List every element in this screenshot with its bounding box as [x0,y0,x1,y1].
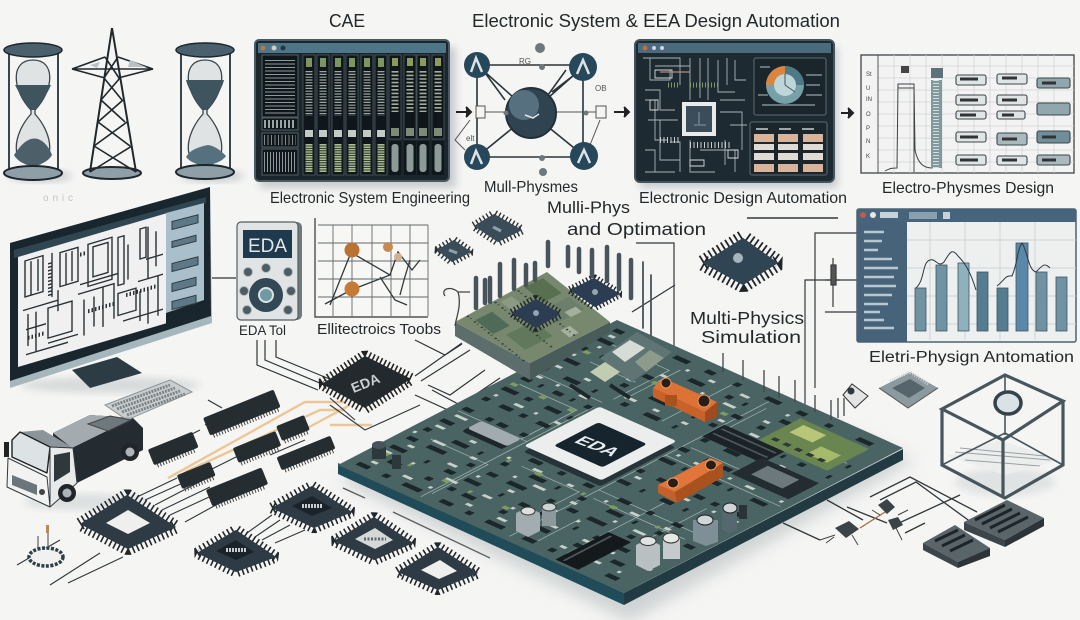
label: EDA tool: EDA Tol [239,322,286,338]
DIP C [233,431,282,464]
window title bar [857,209,1076,222]
orange block rear [653,378,717,422]
truck windshield [12,432,50,473]
chips: bottom row [80,486,478,590]
wires: central connections [208,340,520,558]
central package: EDA [570,434,626,459]
icon: small ring [29,525,63,566]
board chip left [512,299,560,328]
signal columns [303,55,444,175]
label: electronics tools: Ellitectroics Toobs [317,321,441,338]
label: faded text: onic [43,193,73,204]
title: CAE: CAE [329,10,365,31]
buttons [240,264,296,314]
board shadow [338,340,915,620]
truck cargo bed [53,415,143,483]
truck side [50,447,77,507]
network nodes: outer [464,52,598,170]
arrow: design to physics chart [841,108,853,118]
title: electronic system and design automation: Electronic System & EEA Design Automation [472,10,840,31]
board chip right [570,278,620,307]
DIP A [203,389,281,437]
button panel [750,122,827,175]
dark component texture [358,330,883,583]
chip: large multi-physics [703,238,778,285]
chip: EDA labelled package: EDA [349,370,382,396]
trend line [916,243,1050,290]
truck front [7,458,50,507]
axis labels: N [866,139,870,145]
control wheel [249,278,283,312]
wheels [58,443,139,502]
main circuit board [338,320,903,605]
IC: centre right [702,425,784,463]
small tags: elt [466,134,475,143]
monitor top bar [14,197,206,258]
icon: wireframe cube [942,375,1063,498]
raised module near top [570,332,672,398]
copper traces [352,331,883,588]
module: bottom right large [964,500,1044,547]
icon: hourglass left [4,43,72,182]
wires: bottom right [783,477,977,540]
DIP B [148,432,199,466]
board capacitors [372,441,747,571]
chart: electro-physics design [861,55,1074,173]
light component texture [363,333,875,579]
chips: dual inline packages [148,389,336,508]
chip: small top right [474,214,522,242]
truck grille [12,475,37,495]
label: multi-phys heading: Mulli-Phys [547,199,630,217]
panel: electro-physics analysis window [857,209,1076,342]
bars [915,243,1067,331]
wires: orange signal traces [168,402,372,478]
label: simulation: Simulation [701,327,801,347]
circuit schematic [643,58,747,172]
icon: tiny connector [843,384,868,408]
shadow: wireframe cube [955,468,1055,496]
label: electro-physics design: Electro-Physmes Design [882,180,1054,197]
small markers [504,43,588,176]
wires: chip bus [17,398,420,585]
panel: EDA handheld tool: EDA [248,236,287,257]
sidebar [857,222,907,342]
clip [444,289,470,326]
shadow: truck [23,494,147,510]
green component texture [380,348,827,563]
connectors: top right leader lines [632,218,857,413]
network node: centre [506,88,556,138]
chip 3 [272,486,352,528]
pill module [462,421,521,449]
upper daughter board [444,242,651,380]
label: and optimation: and Optimation [567,219,706,239]
axis labels: St [866,72,872,78]
panel: electronic design automation window [635,40,838,188]
grid [907,222,1076,340]
chip 5 [398,547,478,590]
icon: delivery truck [4,415,143,507]
axis labels: IN [866,97,872,103]
small tags: RG [519,57,531,66]
DIP F [177,462,216,490]
pin headers [723,353,844,420]
chip 2 [197,530,276,572]
small tags: OB [595,84,607,93]
icon: transmission tower [72,28,153,179]
diagram: multi-physics network [455,43,607,176]
board edges [338,463,624,605]
IC: right large [731,458,819,499]
EDA display [243,230,292,258]
icon: small iso block [879,372,938,408]
vertical pin row [476,242,651,335]
green island [759,418,869,471]
axis labels [866,72,872,160]
module: bottom right small [923,525,990,568]
orange block front [658,458,723,503]
axis labels: O [866,112,871,118]
axis labels: U [866,86,870,92]
panel: electronic system engineering window [255,40,456,188]
chart: electronics tools [315,218,428,317]
central chip [682,102,716,136]
DIP E [276,436,336,471]
truck roof [20,430,73,448]
chip 4 [334,517,413,560]
chip 1 [80,495,176,549]
panel: EDA handheld tool [237,222,302,320]
arrow: system to network [456,107,471,117]
component tiles [956,74,1070,165]
label: multi-physics: Multi-Physics [690,308,804,328]
label: electronic design automation: Electronic Design Automation [639,190,847,207]
screen sidebar [166,203,204,313]
screen schematic [18,213,166,367]
label: multi-physics network: Mull-Physmes [484,179,578,196]
DIP G [206,467,269,508]
icon: keyboard [105,380,192,420]
board surface [338,320,903,593]
monitor stand [72,357,142,388]
small tags [466,57,607,143]
label: electronic system engineering: Electronic System Engineering [270,190,470,207]
icon: desktop monitor [10,187,212,393]
left tool column [262,55,298,175]
chip: EDA labelled package [322,356,411,408]
axis labels: K [866,154,870,160]
icon: hourglass right [176,43,244,182]
gauge panel [754,58,826,115]
icon: tiny actuators [820,499,908,545]
chip: small top left [437,240,471,262]
axis labels: P [866,126,870,132]
arrow: network to design [614,107,629,117]
connector: monitor to handheld [212,277,236,279]
label: electro-physics automation: Eletri-Physign Antomation [869,349,1074,366]
IC: bottom [555,532,631,570]
central package [517,407,682,486]
DIP D [276,415,310,442]
